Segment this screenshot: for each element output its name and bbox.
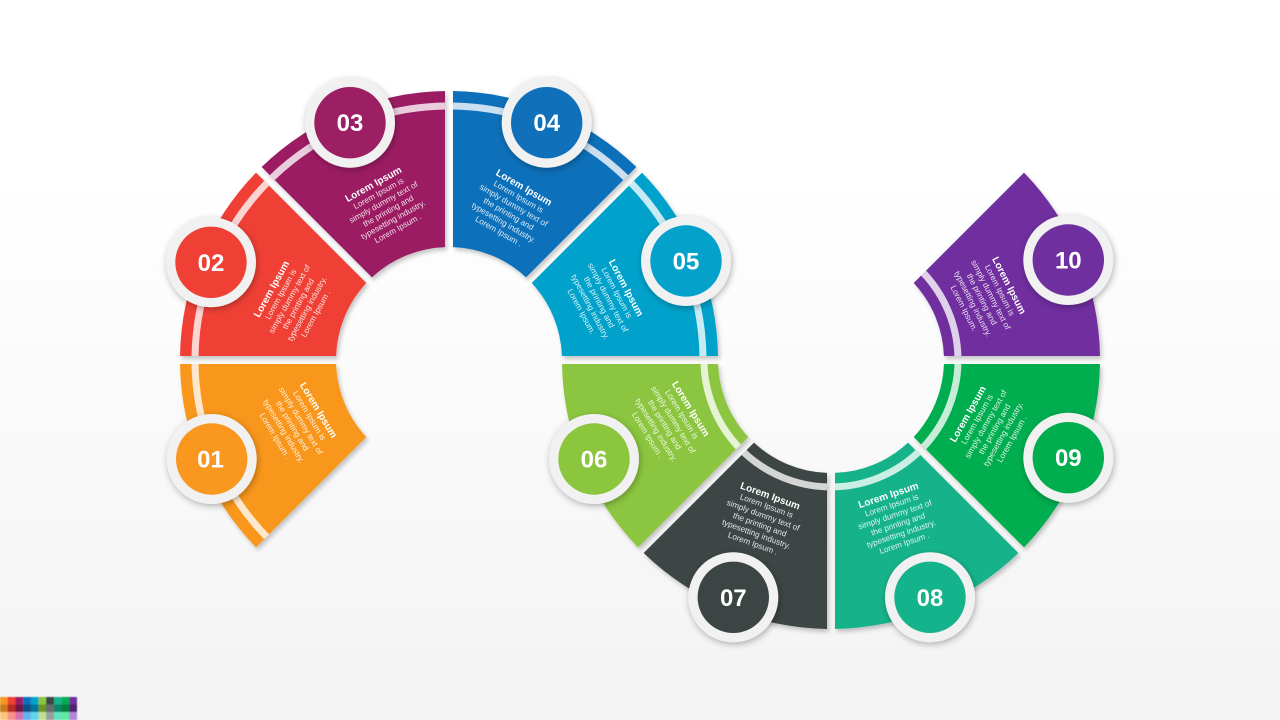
badge 06: 06 <box>581 446 607 474</box>
text 04: the printing and <box>482 196 536 232</box>
badge 10: 10 <box>1055 248 1082 274</box>
badge 09 <box>1023 413 1113 503</box>
text 03: simply dummy text of <box>348 179 420 225</box>
badge 04: 04 <box>533 110 561 137</box>
badge 08 <box>885 552 975 642</box>
text 08: Lorem Ipsum is <box>864 492 920 519</box>
text 08: Lorem Ipsum . <box>878 531 931 556</box>
text 10: typesetting industry. <box>952 270 993 338</box>
text 01: the printing and <box>274 399 311 453</box>
segment 06 <box>545 309 771 555</box>
text 08: Lorem Ipsum <box>857 481 920 511</box>
panel: step 07 <box>636 420 882 646</box>
text 07: simply dummy text of <box>725 498 801 533</box>
text 05: simply dummy text of <box>586 262 630 334</box>
text 06: typesetting industry. <box>633 397 679 463</box>
badge 02: 02 <box>198 250 224 277</box>
text 09: simply dummy text of <box>963 388 1009 460</box>
text 09: the printing and <box>977 402 1013 456</box>
text 01: simply dummy text of <box>277 386 325 457</box>
text 05: Lorem Ipsum <box>606 258 645 319</box>
text 07: the printing and <box>732 511 788 539</box>
badge 07 <box>688 552 778 642</box>
text 10: Lorem Ipsum. <box>948 284 979 333</box>
text 06: simply dummy text of <box>649 385 697 455</box>
text 05: Lorem Ipsum. <box>566 287 597 336</box>
text 04: Lorem Ipsum <box>494 168 554 209</box>
text 03: Lorem Ipsum . <box>373 212 423 245</box>
segment 07 <box>636 420 882 646</box>
text 02: typesetting industry. <box>286 275 329 343</box>
text 06: Lorem Ipsum <box>669 380 711 439</box>
text 09: typesetting industry. <box>982 401 1025 468</box>
text 02: Lorem Ipsum . <box>299 289 333 339</box>
text 07: Lorem Ipsum . <box>727 530 779 557</box>
text 06: Lorem Ipsum is <box>663 388 700 441</box>
panel: step 06 <box>545 309 771 555</box>
text 08: typesetting industry. <box>866 518 937 550</box>
text 03: typesetting industry. <box>359 198 427 241</box>
text 02: simply dummy text of <box>267 263 313 335</box>
panel: step 10 <box>891 165 1117 411</box>
text 04: simply dummy text of <box>478 182 550 229</box>
badge 07: 07 <box>720 585 747 612</box>
panel: step 04 <box>398 74 644 300</box>
text 02: Lorem Ipsum <box>252 259 292 320</box>
text 09: Lorem Ipsum <box>948 384 989 445</box>
text 04: typesetting industry. <box>470 201 537 245</box>
badge 03 <box>305 78 395 168</box>
text 06: Lorem Ipsum . <box>630 411 665 460</box>
badge 01 <box>167 414 257 504</box>
segment 01 <box>163 309 389 555</box>
text 04: Lorem Ipsum is <box>492 179 545 215</box>
panel: step 08 <box>780 420 1026 646</box>
text 09: Lorem Ipsum is <box>960 393 995 446</box>
text 01: Lorem Ipsum . <box>258 412 292 461</box>
segment 09 <box>891 309 1117 555</box>
text 08: simply dummy text of <box>857 498 934 531</box>
panel: step 03 <box>254 74 500 300</box>
segment 10 <box>891 165 1117 411</box>
badge 08: 08 <box>917 585 943 612</box>
text 07: typesetting industry. <box>721 518 792 551</box>
badge 02 <box>166 217 256 307</box>
badge 10 <box>1023 215 1113 305</box>
text 05: typesetting industry. <box>569 273 611 341</box>
panel: step 09 <box>891 309 1117 555</box>
text 07: Lorem Ipsum <box>739 481 801 513</box>
badge 01: 01 <box>197 446 224 474</box>
text 03: the printing and <box>361 193 416 229</box>
badge 05: 05 <box>673 248 699 276</box>
badge 04 <box>502 78 592 168</box>
text 01: typesetting industry. <box>261 398 306 464</box>
text 05: the printing and <box>582 275 616 330</box>
text 02: the printing and <box>281 277 316 331</box>
text 10: Lorem Ipsum <box>989 255 1028 316</box>
text 09: Lorem Ipsum . <box>995 414 1029 464</box>
text 08: the printing and <box>870 511 927 538</box>
text 02: Lorem Ipsum is <box>263 268 298 321</box>
text 05: Lorem Ipsum is <box>599 266 634 320</box>
badge 05 <box>641 216 731 306</box>
text 07: Lorem Ipsum is <box>739 492 794 520</box>
text 10: simply dummy text of <box>969 259 1012 332</box>
segment 05 <box>509 165 735 411</box>
segment 08 <box>780 420 1026 646</box>
panel: step 02 <box>163 165 389 411</box>
text 06: the printing and <box>646 398 683 452</box>
segment 02 <box>163 165 389 411</box>
text 10: Lorem Ipsum is <box>983 263 1016 317</box>
badge 06 <box>549 414 639 504</box>
text 01: Lorem Ipsum <box>297 381 339 440</box>
text 03: Lorem Ipsum is <box>352 176 405 211</box>
colour palette swatches <box>0 697 77 720</box>
text 03: Lorem Ipsum <box>344 165 404 205</box>
text 01: Lorem Ipsum is <box>291 389 328 442</box>
badge 03: 03 <box>337 110 363 137</box>
segment 03 <box>254 74 500 300</box>
panel: step 05 <box>509 165 735 411</box>
text 04: Lorem Ipsum . <box>474 214 523 248</box>
panel: step 01 <box>163 309 389 555</box>
text 10: the printing and <box>965 272 999 327</box>
badge 09: 09 <box>1055 445 1082 472</box>
segment 04 <box>398 74 644 300</box>
